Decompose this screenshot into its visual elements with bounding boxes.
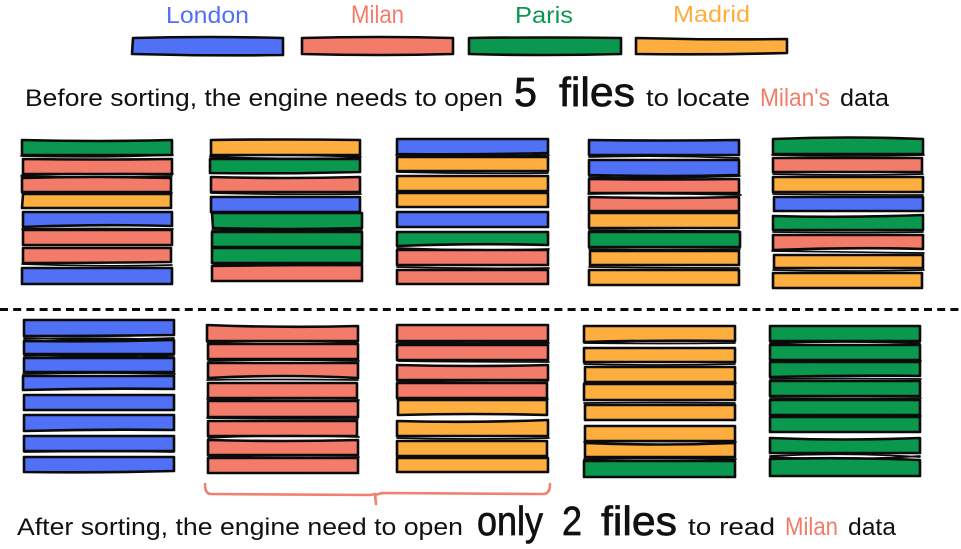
heading: before sorting: Milan's: [760, 84, 830, 112]
dashed divider: [0, 308, 961, 311]
legend item: Madrid: [636, 1, 787, 54]
heading: after sorting: to read: [688, 514, 775, 541]
heading: after sorting: data: [848, 514, 897, 541]
before: file 5: [772, 138, 924, 288]
heading: after sorting: only: [477, 498, 543, 544]
legend item: London: [132, 2, 283, 55]
after: file 4 Madrid and Paris: [584, 326, 736, 477]
legend item: Paris: Paris: [515, 2, 573, 28]
legend item: Milan: Milan: [351, 1, 404, 29]
after: file 1 London: [23, 320, 175, 472]
bracket: Milan files: [205, 484, 550, 504]
after: file 5 Paris: [770, 326, 921, 476]
before: file 1: [21, 140, 173, 284]
heading: after sorting: After sorting, the engine need to open: [17, 514, 463, 541]
heading: before sorting: 5: [514, 69, 537, 115]
heading: before sorting: to locate: [646, 85, 750, 112]
after: file 3 Milan and Madrid: [396, 325, 549, 472]
legend item: Paris: [469, 2, 621, 55]
heading: before sorting: files: [559, 69, 635, 115]
heading: before sorting: Before sorting, the engine needs to open: [25, 85, 503, 112]
before: file 2: [210, 140, 362, 281]
heading: after sorting: files: [601, 498, 677, 544]
legend: [132, 1, 787, 55]
legend item: Madrid: Madrid: [673, 1, 750, 27]
after: file 2 Milan: [207, 325, 359, 473]
heading: after sorting: Milan: [785, 513, 838, 541]
legend item: Milan: [302, 1, 453, 55]
heading: after sorting: 2: [562, 498, 582, 544]
heading: before sorting: data: [840, 85, 890, 112]
before: file 4: [588, 140, 741, 285]
legend item: London: London: [166, 2, 249, 28]
before: file 3: [396, 139, 549, 284]
